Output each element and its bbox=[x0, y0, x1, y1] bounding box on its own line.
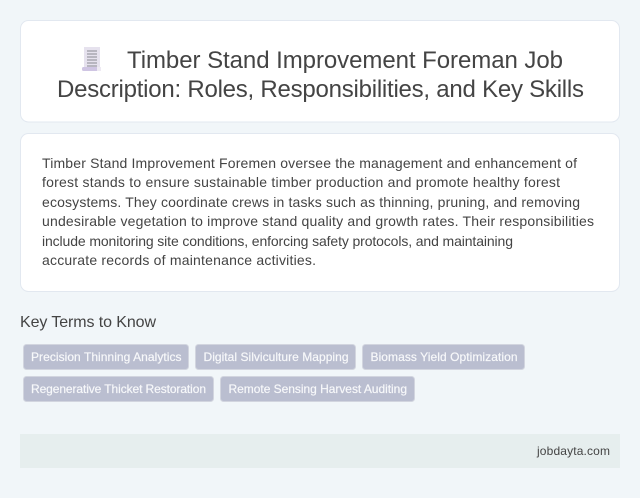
tag: digital silviculture mapping: Digital Silviculture Mapping bbox=[204, 350, 348, 364]
tag: precision thinning analytics bbox=[24, 344, 188, 370]
tag: biomass yield optimization bbox=[362, 344, 524, 370]
tag: digital silviculture mapping bbox=[196, 344, 356, 370]
tag: regenerative thicket restoration bbox=[24, 376, 214, 402]
panel: title card bbox=[20, 20, 620, 122]
heading: key terms: Key Terms to Know bbox=[20, 314, 156, 331]
footer bbox=[20, 434, 620, 468]
text block: description: forest stands to ensure sustainable timber production and promote healthy forest bbox=[42, 174, 560, 190]
text block: description: ecosystems. They coordinate crews in tasks such as thinning, pruning, and removing bbox=[42, 194, 580, 210]
text block: description: include monitoring site conditions, enforcing safety protocols, and maintaining bbox=[42, 233, 513, 249]
panel: description card bbox=[20, 134, 620, 292]
text block: description bbox=[42, 155, 594, 268]
text block: description: undesirable vegetation to improve stand quality and growth rates. Their responsibilities bbox=[42, 213, 594, 229]
tag: remote sensing harvest auditing: Remote Sensing Harvest Auditing bbox=[228, 382, 407, 396]
heading: title: Description: Roles, Responsibilities, and Key Skills bbox=[57, 76, 584, 103]
icon: document scroll bbox=[82, 47, 101, 71]
text block: description: Timber Stand Improvement Foremen oversee the management and enhancement of bbox=[42, 155, 577, 171]
text block: description: accurate records of maintenance activities. bbox=[42, 252, 316, 268]
tag: biomass yield optimization: Biomass Yield Optimization bbox=[370, 350, 518, 364]
tag list: key terms bbox=[24, 344, 524, 402]
heading: title: Timber Stand Improvement Foreman Job bbox=[127, 47, 563, 74]
tag: precision thinning analytics: Precision Thinning Analytics bbox=[31, 350, 182, 364]
heading: title bbox=[57, 47, 584, 103]
footer text: source: jobdayta.com bbox=[536, 444, 610, 458]
tag: remote sensing harvest auditing bbox=[220, 376, 414, 402]
tag: regenerative thicket restoration: Regenerative Thicket Restoration bbox=[31, 382, 206, 396]
